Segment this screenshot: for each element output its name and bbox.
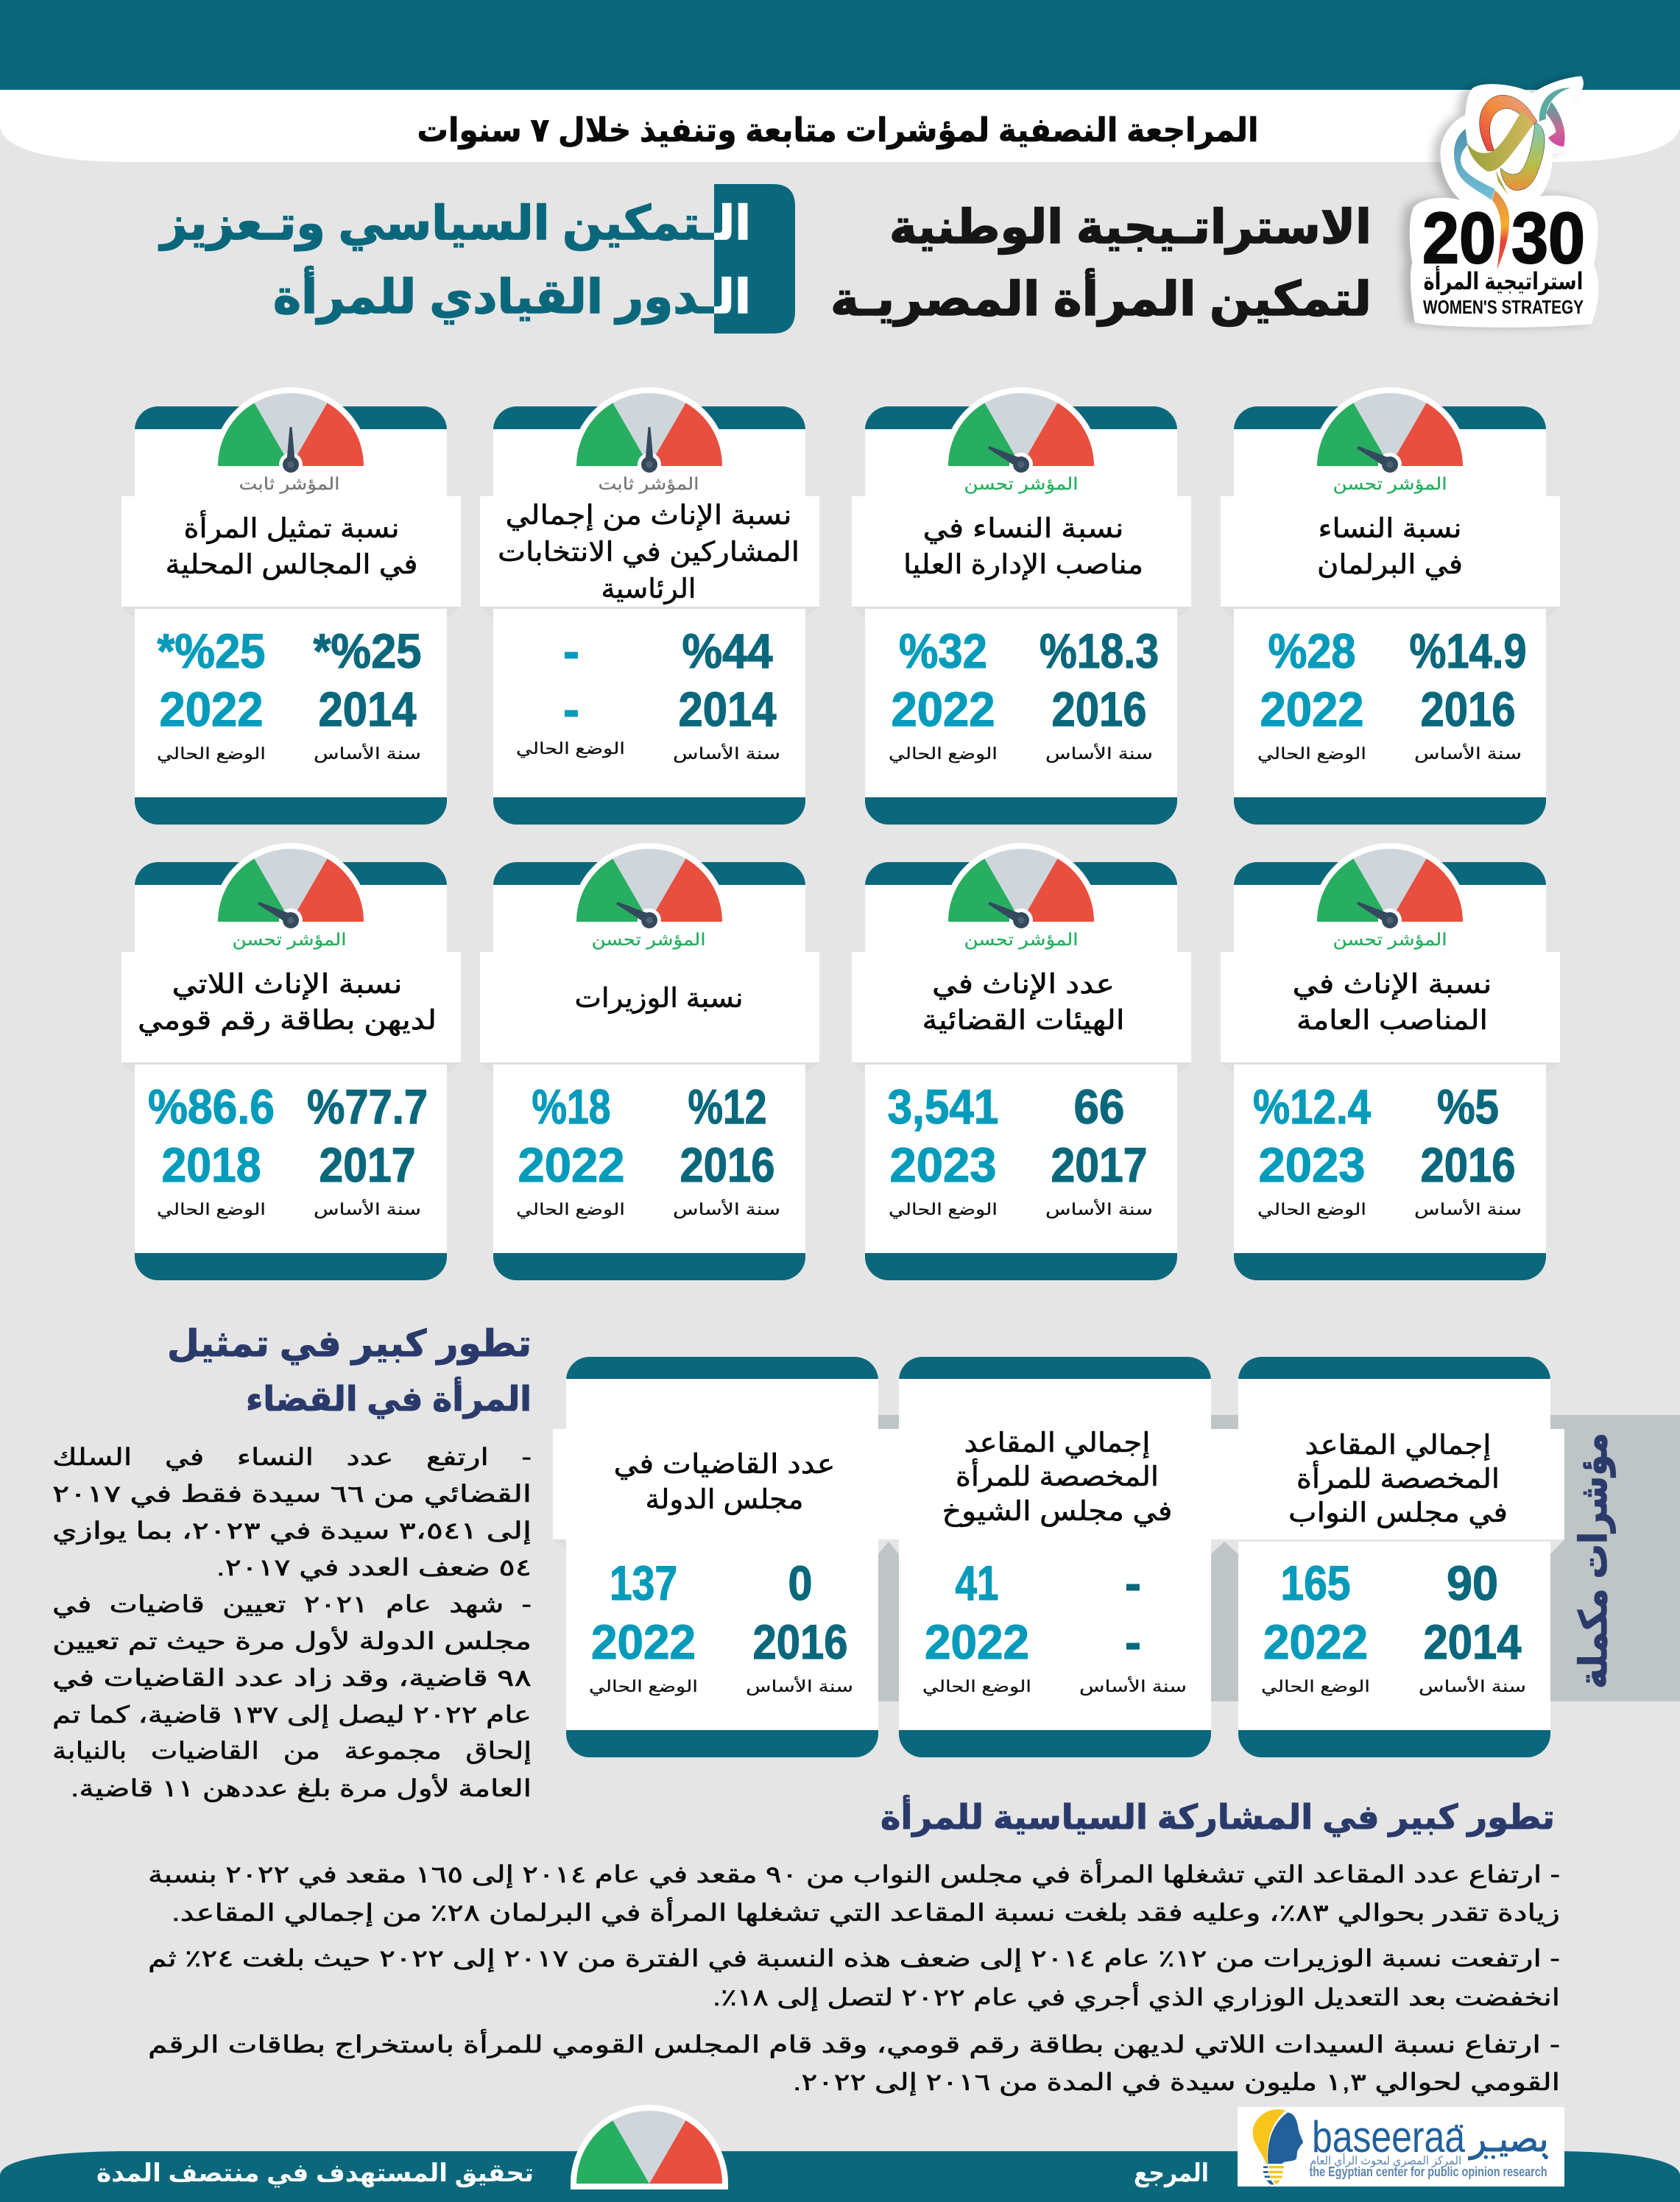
- baseline values: [746, 1556, 853, 1696]
- baseline values: 2016: [1421, 682, 1515, 736]
- card title: في مجلس النواب: [1288, 1497, 1508, 1528]
- status: المؤشر تحسن: [964, 474, 1078, 494]
- current values: %12.4: [1253, 1079, 1371, 1134]
- heading: judiciary: المرأة في القضاء: [246, 1377, 532, 1419]
- card title: لديهن بطاقة رقم قومي: [138, 1005, 437, 1036]
- card title: نسبة تمثيل المرأة: [184, 510, 399, 544]
- swirl olive: [1467, 112, 1533, 172]
- current values: [888, 1079, 998, 1219]
- current values: 41: [956, 1556, 998, 1610]
- current values: الوضع الحالي: [157, 744, 266, 763]
- baseline values: [1419, 1556, 1526, 1696]
- current values: -: [563, 624, 579, 678]
- text block: political participation: [148, 1859, 1560, 2096]
- baseline values: 2014: [318, 682, 417, 736]
- logo: baseera: المركز المصري لبحوث الرأي العام: [1310, 2153, 1461, 2168]
- gauge: improved: [1311, 843, 1469, 932]
- panel: women in local councils: [121, 387, 461, 825]
- baseline values: 0: [788, 1556, 813, 1610]
- card title: مناصب الإدارة العليا: [903, 549, 1143, 580]
- baseline values: 2014: [679, 682, 777, 736]
- pillar title: الـدور القيادي للمرأة: [273, 266, 751, 325]
- current values: الوضع الحالي: [889, 1200, 998, 1219]
- current values: 2022: [591, 1615, 696, 1669]
- text block: political participation: زيادة تقدر بحوالي ٨٣٪، وعليه فقد بلغت نسبة المقاعد التي تشغلها المرأة في البرلمان ٢٨٪ من إجمالي المقاعد.: [172, 1897, 1560, 1927]
- heading: political participation: تطور كبير في المشاركة السياسية للمرأة: [880, 1795, 1555, 1837]
- baseline values: سنة الأساس: [1079, 1676, 1187, 1696]
- current values: الوضع الحالي: [1261, 1677, 1370, 1696]
- current values: الوضع الحالي: [1257, 1200, 1366, 1219]
- card title: عدد الإناث في: [932, 969, 1115, 1000]
- card title: الرئاسية: [601, 574, 696, 604]
- baseline values: %5: [1437, 1079, 1499, 1134]
- gauge: improved: [212, 843, 370, 932]
- baseline values: [1079, 1556, 1187, 1696]
- panel: women with national id: [121, 843, 461, 1280]
- footer gauge icon: [571, 2105, 728, 2189]
- logo: baseera: baseeraa: [1312, 2112, 1466, 2162]
- card title: [1288, 1430, 1508, 1528]
- current values: [922, 1556, 1031, 1696]
- card title: نسبة الإناث في: [1293, 969, 1492, 1000]
- text block: political participation: - ارتفاع نسبة السيدات اللاتي لديهن بطاقة رقم قومي، وقد قام المجلس القومي للمرأة باستخراج بطاقات الرقم: [148, 2029, 1560, 2058]
- text block: judiciary: القضائي من ٦٦ سيدة فقط في ٢٠١٧: [52, 1481, 532, 1508]
- baseline values: سنة الأساس: [746, 1676, 853, 1696]
- gauge: stable: [212, 387, 370, 476]
- baseline values: 2016: [752, 1615, 848, 1669]
- text block: judiciary: عام ٢٠٢٢ ليصل إلى ١٣٧ قاضية، كما تم: [52, 1701, 532, 1729]
- baseline values: -: [1125, 1556, 1141, 1610]
- swirl blue: [1454, 129, 1495, 200]
- baseline values: %12: [688, 1079, 767, 1134]
- current values: 2022: [1263, 1615, 1368, 1669]
- current values: [1257, 624, 1366, 763]
- current values: 3,541: [888, 1079, 998, 1134]
- top teal band: [0, 0, 1680, 90]
- current values: [889, 624, 998, 763]
- text block: judiciary: - شهد عام ٢٠٢١ تعيين قاضيات في: [52, 1591, 532, 1618]
- panel: women ministers: [480, 843, 819, 1280]
- baseline values: 90: [1447, 1556, 1498, 1610]
- text block: judiciary: العامة لأول مرة بلغ عددهن ١١ قاضية.: [71, 1774, 532, 1802]
- current values: [516, 1079, 625, 1219]
- text block: judiciary: - ارتفع عدد النساء في السلك: [52, 1444, 532, 1471]
- baseline values: 2016: [1051, 682, 1147, 736]
- baseline values: سنة الأساس: [1419, 1676, 1526, 1696]
- logo: baseera: the Egyptian center for public opinion research: [1309, 2164, 1547, 2179]
- current values: 137: [610, 1556, 677, 1610]
- card title: [903, 513, 1143, 580]
- current values: %32: [899, 624, 987, 678]
- card title: المشاركين في الانتخابات: [498, 537, 800, 568]
- swirl lower bowl: [1500, 123, 1545, 190]
- logo: baseera: بصيـر: [1469, 2120, 1549, 2160]
- text block: judiciary: إلى ٣،٥٤١ سيدة في ٢٠٢٣، بما يوازي: [52, 1517, 532, 1545]
- baseline values: [1045, 1079, 1153, 1219]
- card title: [1317, 513, 1463, 580]
- logo: women's strategy 2030: 30: [1511, 197, 1585, 278]
- current values: الوضع الحالي: [922, 1677, 1031, 1696]
- footer text: target achievement: تحقيق المستهدف في منتصف المدة: [96, 2159, 534, 2188]
- pillar title: الـتمكين السياسي وتـعزيز: [158, 197, 751, 251]
- baseline values: %77.7: [307, 1079, 428, 1134]
- current values: 2022: [1260, 682, 1363, 736]
- baseline values: سنة الأساس: [314, 744, 421, 763]
- baseline values: سنة الأساس: [1045, 744, 1153, 763]
- gauge: improved: [1311, 387, 1469, 476]
- baseline values: *%25: [314, 624, 421, 678]
- baseline values: سنة الأساس: [673, 1199, 780, 1219]
- baseline values: [1414, 1079, 1522, 1219]
- pillar title: [158, 197, 751, 325]
- card title: [614, 1449, 835, 1515]
- status: المؤشر تحسن: [964, 930, 1078, 950]
- card title: المناصب العامة: [1296, 1005, 1488, 1035]
- baseline values: سنة الأساس: [1045, 1199, 1153, 1219]
- baseline values: %14.9: [1409, 624, 1527, 678]
- main title: لتمكين المرأة المصريـة: [830, 268, 1372, 327]
- current values: [516, 624, 625, 758]
- main title: [830, 200, 1372, 327]
- text block: judiciary: مجلس الدولة لأول مرة حيث تم تعيين: [52, 1626, 532, 1655]
- baseline values: 2016: [680, 1137, 774, 1192]
- panel: women in senior management: [852, 387, 1191, 825]
- baseline values: %44: [682, 624, 773, 678]
- panel: women's seats in senate: [886, 1357, 1238, 1757]
- panel: women in public positions: [1221, 843, 1560, 1280]
- baseline values: -: [1125, 1615, 1141, 1669]
- panel: women in presidential elections: [480, 387, 819, 825]
- baseline values: سنة الأساس: [1414, 744, 1522, 763]
- current values: الوضع الحالي: [589, 1677, 698, 1696]
- card title: [1293, 969, 1492, 1035]
- baseline values: [314, 624, 421, 763]
- card title: في البرلمان: [1317, 549, 1463, 580]
- card title: في مجلس الشيوخ: [942, 1496, 1172, 1527]
- card title: إجمالي المقاعد: [1305, 1430, 1492, 1461]
- current values: [1261, 1556, 1370, 1696]
- baseline values: سنة الأساس: [314, 1199, 421, 1219]
- baseline values: 2016: [1421, 1137, 1515, 1192]
- card title: [922, 969, 1125, 1036]
- swirl right hook: [1539, 88, 1570, 121]
- current values: 165: [1281, 1556, 1350, 1610]
- footer text: reference: المرجع: [1134, 2159, 1209, 2188]
- baseline values: سنة الأساس: [673, 744, 780, 763]
- current values: *%25: [158, 624, 265, 678]
- current values: 2022: [891, 682, 995, 736]
- header white panel: [0, 90, 1680, 162]
- current values: 2023: [1259, 1137, 1365, 1192]
- baseline values: %18.3: [1040, 624, 1159, 678]
- text block: political participation: انخفضت بعد التعديل الوزاري الذي أجري في عام ٢٠٢٢ لتصل إلى ١٨٪.: [713, 1982, 1560, 2011]
- main title: الاستراتـيجية الوطنية: [889, 200, 1372, 255]
- status: المؤشر تحسن: [1333, 474, 1447, 494]
- current values: [1253, 1079, 1371, 1219]
- status: المؤشر ثابت: [598, 474, 699, 494]
- text block: judiciary: [52, 1444, 532, 1802]
- current values: %28: [1268, 624, 1356, 678]
- card title: إجمالي المقاعد: [964, 1428, 1150, 1458]
- card title: نسبة الإناث من إجمالي: [505, 500, 792, 531]
- text block: judiciary: ٩٨ قاضية، وقد زاد عدد القاضيات في: [52, 1665, 532, 1692]
- text block: judiciary: إلحاق مجموعة من القاضيات بالنيابة: [52, 1737, 532, 1765]
- card title: المخصصة للمرأة: [956, 1458, 1159, 1492]
- baseline values: [673, 624, 780, 763]
- current values: الوضع الحالي: [516, 739, 625, 758]
- current values: الوضع الحالي: [889, 744, 998, 763]
- card title: [138, 969, 437, 1036]
- logo: women's strategy 2030: [1410, 76, 1598, 328]
- baseline values: [307, 1079, 428, 1219]
- current values: %86.6: [148, 1079, 275, 1134]
- baseline values: 2014: [1424, 1615, 1522, 1669]
- current values: الوضع الحالي: [1257, 744, 1366, 763]
- swirl orange loop: [1480, 95, 1537, 151]
- current values: 2022: [159, 682, 264, 736]
- baseline values: سنة الأساس: [1414, 1199, 1522, 1219]
- current values: 2023: [889, 1137, 997, 1192]
- status: المؤشر تحسن: [233, 930, 346, 950]
- band label: مؤشرات مكملة: [1573, 1433, 1616, 1689]
- baseline values: [673, 1079, 780, 1219]
- current values: [589, 1556, 698, 1696]
- logo: baseera: [1238, 2107, 1564, 2187]
- card title: المخصصة للمرأة: [1296, 1461, 1500, 1495]
- card title: الهيئات القضائية: [922, 1005, 1125, 1036]
- card title: عدد القاضيات في: [614, 1449, 835, 1480]
- status: المؤشر تحسن: [1333, 930, 1447, 950]
- current values: -: [563, 682, 579, 736]
- baseline values: 2017: [1051, 1137, 1147, 1192]
- logo: women's strategy 2030: WOMEN'S STRATEGY: [1423, 296, 1584, 318]
- status: المؤشر تحسن: [592, 930, 705, 950]
- panel: women's seats in house of representatives: [1225, 1357, 1564, 1757]
- heading: judiciary: تطور كبير في تمثيل: [167, 1323, 532, 1366]
- panel: women in judicial bodies: [852, 843, 1191, 1280]
- current values: الوضع الحالي: [157, 1200, 266, 1219]
- baseline values: 2017: [320, 1137, 415, 1192]
- current values: 2018: [162, 1137, 261, 1192]
- gauge: improved: [571, 843, 728, 932]
- card title: مجلس الدولة: [645, 1484, 804, 1515]
- current values: 2022: [518, 1137, 624, 1192]
- text block: political participation: - ارتفاع عدد المقاعد التي تشغلها المرأة في مجلس النواب من ٩٠ مقعد في عام ٢٠١٤ إلى ١٦٥ مقعد في ٢٠٢٢ بنسبة: [148, 1859, 1560, 1888]
- gauge: improved: [942, 843, 1100, 932]
- gauge: stable: [571, 387, 728, 476]
- footer band: [0, 2151, 1680, 2202]
- card title: نسبة النساء في: [923, 513, 1123, 544]
- baseline values: [1409, 624, 1527, 763]
- current values: %18: [532, 1079, 611, 1134]
- baseline values: [1040, 624, 1159, 763]
- current values: [157, 624, 266, 763]
- teal divider block: [714, 184, 795, 334]
- text block: political participation: القومي لحوالي ١,٣ مليون سيدة في المدة من ٢٠١٦ إلى ٢٠٢٢.: [793, 2069, 1560, 2096]
- subtitle: المراجعة النصفية لمؤشرات متابعة وتنفيذ خلال ٧ سنوات: [417, 111, 1258, 149]
- card title: [165, 510, 418, 580]
- card title: نسبة الوزيرات: [574, 983, 744, 1014]
- card title: [498, 500, 800, 604]
- card title: نسبة الإناث اللاتي: [172, 969, 402, 1000]
- text block: political participation: - ارتفعت نسبة الوزيرات من ١٢٪ عام ٢٠١٤ إلى ضعف هذه النسبة في الفترة من ٢٠١٧ إلى ٢٠٢٢ حيث بلغت ٢٤٪ ثم: [148, 1945, 1560, 1972]
- baseline values: 66: [1073, 1079, 1125, 1134]
- card title: [942, 1428, 1172, 1527]
- gauge: improved: [942, 387, 1100, 476]
- current values: [148, 1079, 275, 1219]
- card title: نسبة النساء: [1318, 513, 1462, 543]
- status: المؤشر ثابت: [239, 474, 340, 494]
- swirl stem: [1492, 190, 1509, 269]
- card title: في المجالس المحلية: [165, 549, 418, 580]
- panel: women in parliament: [1221, 387, 1560, 825]
- current values: الوضع الحالي: [516, 1200, 625, 1219]
- logo: women's strategy 2030: استراتيجية المرأة: [1424, 266, 1583, 295]
- logo: women's strategy 2030: 20: [1422, 197, 1496, 278]
- text block: judiciary: ٥٤ ضعف العدد في ٢٠١٧.: [216, 1554, 532, 1581]
- heading: judiciary: [167, 1323, 532, 1419]
- panel: female judges in state council: [553, 1357, 899, 1757]
- complementary indicators band: [736, 1415, 1680, 1701]
- current values: 2022: [925, 1615, 1029, 1669]
